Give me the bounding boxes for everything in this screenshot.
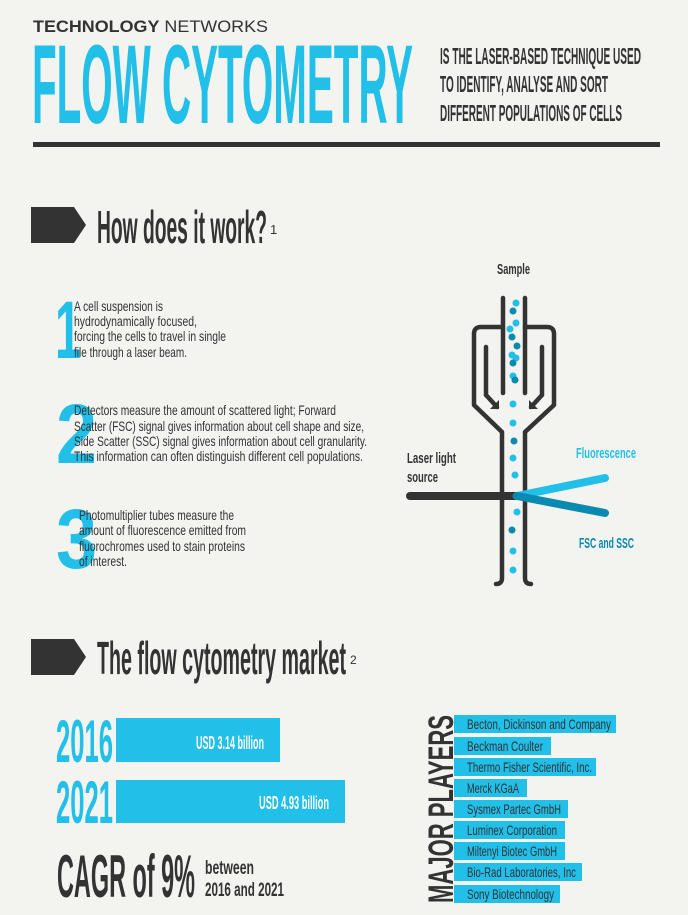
fsc ssc beam: [517, 496, 605, 513]
bar 2016: 2016: [56, 708, 113, 775]
step 3: fluorochromes used to stain proteins: [79, 538, 245, 554]
major players list: Sony Biotechnology: [467, 886, 554, 902]
diagram: flow cell: [407, 261, 636, 584]
step 2: This information can often distinguish different cell populations.: [74, 448, 363, 464]
step 1: 1: [55, 285, 81, 376]
major players list: Sysmex Partec GmbH: [467, 801, 561, 817]
label: laser light source: source: [407, 469, 438, 486]
label: laser light source: Laser light: [407, 450, 456, 467]
section heading: how does it work: [31, 201, 277, 253]
step 3: 3: [56, 492, 97, 586]
step 2: Detectors measure the amount of scattered light; Forward: [74, 402, 336, 418]
bar 2016: [56, 708, 280, 775]
major players list: Beckman Coulter: [467, 738, 543, 754]
step 1: forcing the cells to travel in single: [74, 328, 226, 344]
cagr: CAGR of 9%: [57, 843, 195, 910]
step 3: amount of fluorescence emitted from: [79, 522, 246, 538]
major players list: [422, 715, 616, 903]
step 3: Photomultiplier tubes measure the: [79, 507, 234, 523]
bar 2021: USD 4.93 billion: [259, 793, 329, 813]
text: How does it work?: [97, 201, 267, 253]
bar 2016: USD 3.14 billion: [196, 733, 264, 753]
major players list: Luminex Corporation: [467, 822, 557, 838]
section heading: how does it work: 1: [270, 222, 277, 237]
step 1: hydrodynamically focused,: [74, 313, 197, 329]
major players list: Miltenyi Biotec GmbH: [467, 843, 557, 859]
step 2: [56, 387, 367, 481]
bar 2021: 2021: [56, 769, 113, 836]
major players list: Becton, Dickinson and Company: [467, 716, 611, 732]
step 2: 2: [56, 387, 97, 481]
step 3: [56, 492, 246, 586]
bar 2021: [56, 769, 345, 836]
cagr: 2016 and 2021: [205, 880, 284, 901]
step 1: file through a laser beam.: [74, 344, 187, 360]
step 2: Scatter (FSC) signal gives information about cell shape and size,: [74, 418, 364, 434]
major players list: Bio-Rad Laboratories, Inc: [467, 864, 576, 880]
step 1: [55, 285, 226, 376]
label: fluorescence: Fluorescence: [576, 445, 636, 462]
cagr: between: [205, 858, 254, 879]
label: laser light source: [407, 450, 456, 486]
step 3: of interest.: [79, 553, 127, 569]
label: fsc and ssc: FSC and SSC: [579, 535, 634, 552]
major players list: Thermo Fisher Scientific, Inc.: [467, 759, 592, 775]
section heading: market: [31, 632, 357, 684]
major players list: Merck KGaA: [467, 780, 519, 796]
cells: [506, 300, 520, 574]
step 2: Side Scatter (SSC) signal gives information about cell granularity.: [74, 433, 367, 449]
cagr: [57, 843, 284, 910]
major players list: MAJOR PLAYERS: [422, 715, 461, 903]
subtitle: [440, 43, 641, 126]
fluorescence beam: [517, 478, 605, 496]
laser beam: [410, 492, 517, 500]
text: The flow cytometry market: [97, 632, 346, 684]
step 1: A cell suspension is: [74, 298, 163, 314]
label: sample: Sample: [497, 261, 530, 278]
logo: technology networks: TECHNOLOGY NETWORKS: [33, 17, 268, 36]
section heading: market: 2: [350, 653, 357, 667]
